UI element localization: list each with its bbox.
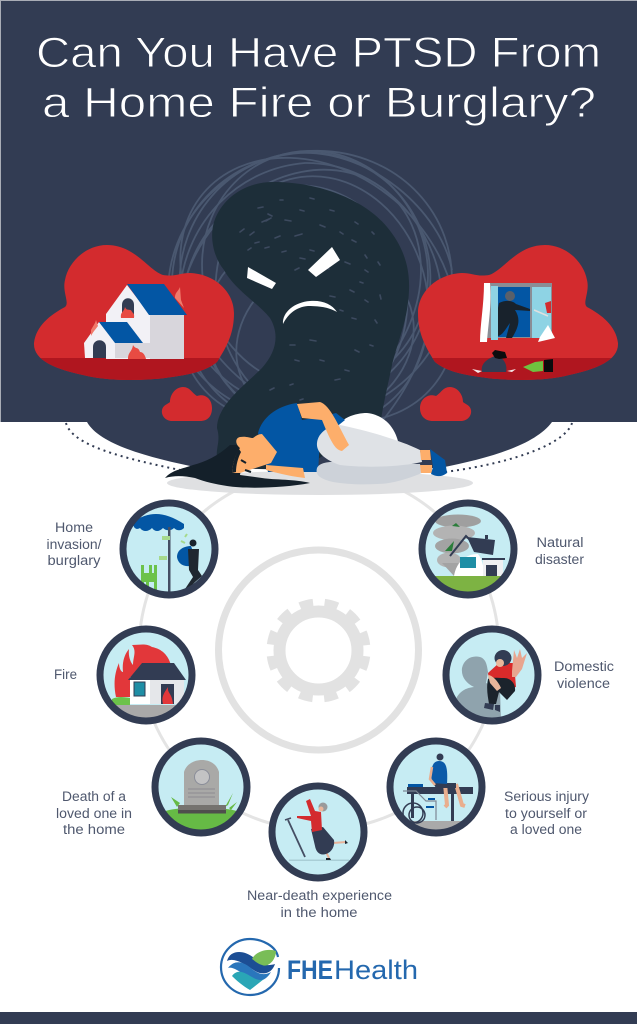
scribble halo around shadow monster xyxy=(127,103,509,477)
label: Fire xyxy=(54,667,77,682)
shadow monster xyxy=(212,182,409,470)
label: violence xyxy=(557,676,610,691)
icon: burning house xyxy=(84,284,187,359)
item: home invasion xyxy=(46,503,215,595)
title: Can You Have PTSD From xyxy=(36,29,601,77)
icon: window with burglar xyxy=(480,283,555,342)
hair xyxy=(165,445,310,488)
item: natural disaster xyxy=(422,503,585,595)
label: the home xyxy=(63,822,125,837)
header background xyxy=(0,0,637,468)
logo wordmark: FHE xyxy=(287,955,333,985)
label xyxy=(247,888,392,920)
label: Home xyxy=(55,520,93,535)
white hip xyxy=(335,413,399,460)
label xyxy=(46,520,102,568)
title xyxy=(36,29,601,127)
lower leg xyxy=(317,462,422,484)
upper leg xyxy=(317,425,422,467)
circle icon: burglar xyxy=(123,503,215,595)
label: a loved one xyxy=(510,822,582,837)
floor shadow xyxy=(167,471,473,495)
small cloud right xyxy=(420,387,471,421)
item: death of a loved one xyxy=(56,741,247,837)
blue shirt xyxy=(258,403,345,472)
cloud: burglar xyxy=(412,245,622,383)
dotted arc left xyxy=(66,423,190,472)
logo xyxy=(221,939,418,995)
lower arm xyxy=(266,465,305,478)
connecting ring xyxy=(139,470,499,830)
label: in the home xyxy=(280,905,358,920)
label xyxy=(535,535,585,567)
arm over knees xyxy=(297,402,349,451)
item: domestic violence xyxy=(446,629,614,721)
cloud: burning house xyxy=(30,245,240,383)
label: Death of a xyxy=(62,789,127,804)
footer bar xyxy=(0,1012,637,1024)
circle icon: falling woman xyxy=(272,786,364,878)
central ring xyxy=(218,550,418,750)
item: serious injury xyxy=(390,741,589,837)
label: to yourself or xyxy=(505,806,588,821)
label xyxy=(554,659,614,691)
circle icon: gravestone xyxy=(155,741,247,833)
small cloud left xyxy=(162,387,212,421)
circle icon: tornado and house xyxy=(422,503,514,595)
logo wordmark: Health xyxy=(334,955,418,985)
item: fire xyxy=(54,629,192,721)
monster texture xyxy=(240,198,381,400)
label: Near-death experience xyxy=(247,888,392,903)
icon: loot bag and broken plant xyxy=(472,350,553,373)
monster eye left xyxy=(247,267,276,289)
curled up woman xyxy=(165,402,447,488)
circle icon: frightened person xyxy=(446,629,538,721)
label: invasion/ xyxy=(46,537,102,552)
logo mark xyxy=(221,939,279,995)
label: burglary xyxy=(48,553,101,568)
feet xyxy=(420,450,432,473)
label xyxy=(56,789,132,837)
label xyxy=(504,789,589,837)
label: Domestic xyxy=(554,659,614,674)
circle icon: house fire xyxy=(100,629,192,721)
logo wordmark xyxy=(287,955,418,985)
face xyxy=(232,434,277,473)
gear icon xyxy=(270,602,366,698)
label: disaster xyxy=(535,552,585,567)
item: near-death xyxy=(247,786,392,920)
monster eye right xyxy=(308,247,340,277)
label: Serious injury xyxy=(504,789,589,804)
dotted arc right xyxy=(445,423,572,472)
label: loved one in xyxy=(56,806,132,821)
title: a Home Fire or Burglary? xyxy=(42,79,596,127)
circle icon: patient on bed xyxy=(390,741,482,833)
monster mouth xyxy=(283,301,337,324)
label: Natural xyxy=(536,535,584,550)
